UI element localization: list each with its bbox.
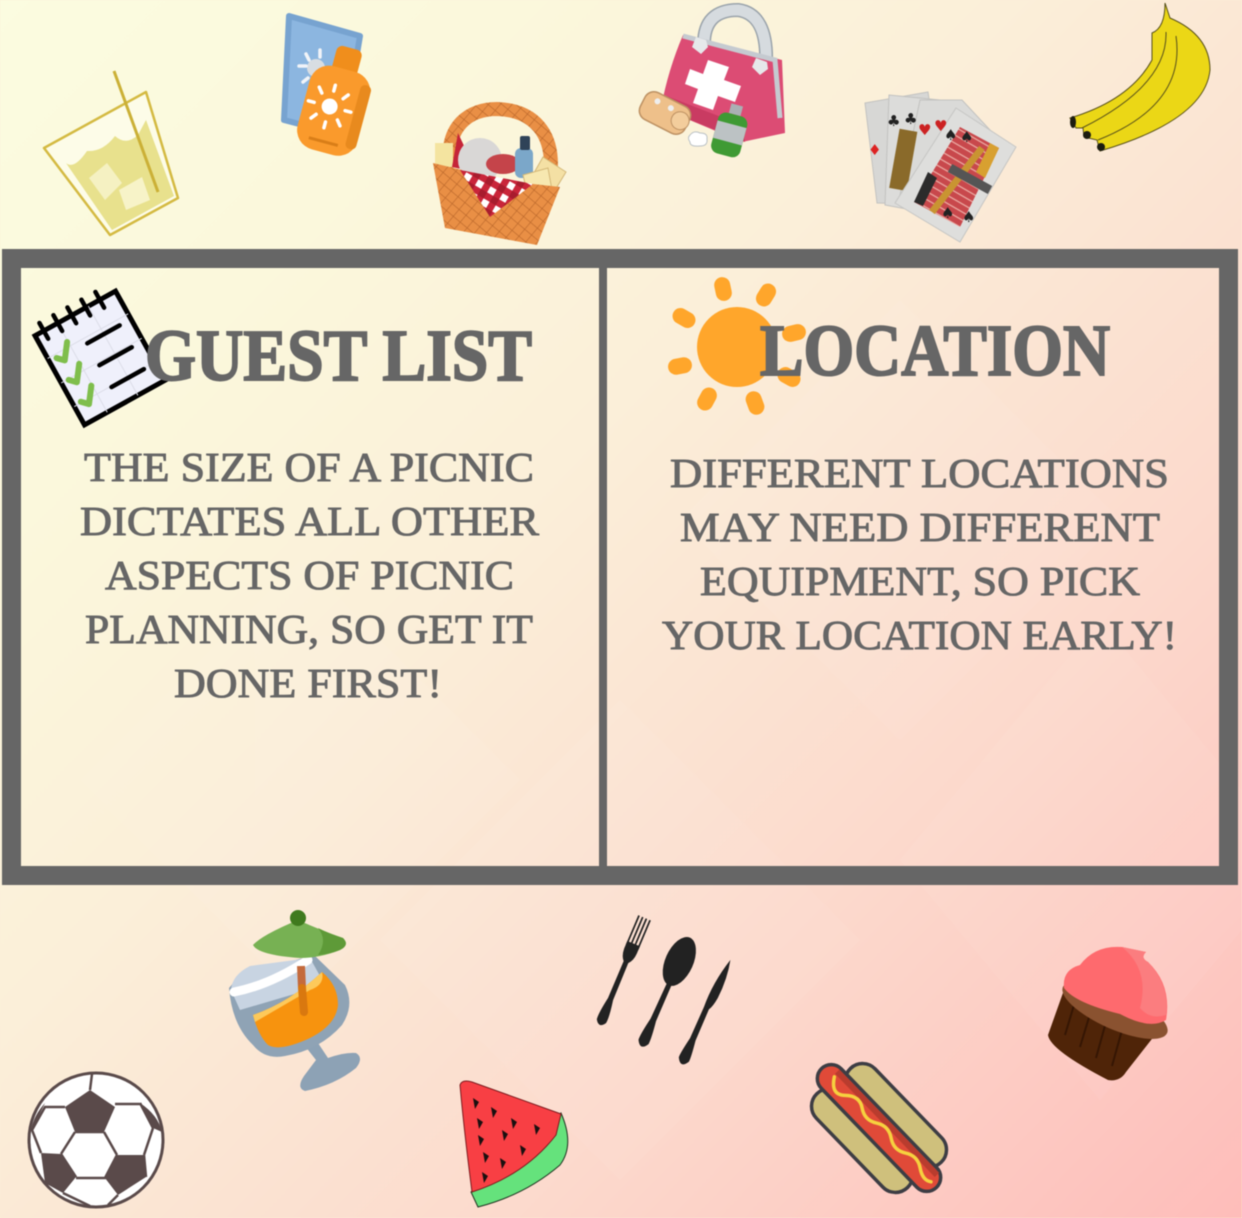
icon: sunscreen bbox=[284, 16, 380, 160]
text block: guest list body: PLANNING, SO GET IT bbox=[85, 606, 533, 652]
icon: cocktail with umbrella bbox=[229, 910, 360, 1091]
icon: lemonade glass bbox=[44, 71, 178, 235]
heading: location: LOCATION bbox=[760, 310, 1110, 391]
icon: playing cards: ♥ bbox=[934, 117, 947, 135]
icon: playing cards: ♥ bbox=[918, 121, 931, 139]
panel: location bbox=[662, 276, 1177, 658]
icon: fork, spoon and knife bbox=[593, 915, 734, 1067]
text block: guest list body: ASPECTS OF PICNIC bbox=[105, 552, 514, 598]
text block: guest list body: DONE FIRST! bbox=[174, 660, 442, 706]
text block: guest list body: DICTATES ALL OTHER bbox=[80, 498, 540, 544]
icon: cupcake bbox=[1048, 947, 1175, 1080]
icon: checklist notepad bbox=[31, 283, 165, 425]
icon: playing cards: ♠ bbox=[960, 128, 973, 146]
text block: location body: MAY NEED DIFFERENT bbox=[680, 504, 1160, 550]
frame: grey border and divider bbox=[2, 249, 1238, 885]
icon: playing cards: ♦ bbox=[868, 141, 881, 159]
icon: sun bbox=[667, 276, 807, 417]
icon: soccer ball bbox=[29, 1073, 163, 1207]
heading: guest list: GUEST LIST bbox=[145, 315, 532, 396]
icon: playing cards: ♣ bbox=[887, 112, 900, 130]
text block: location body: EQUIPMENT, SO PICK bbox=[700, 558, 1140, 604]
icon: playing cards bbox=[865, 92, 1016, 242]
icon: playing cards: ♠ bbox=[944, 126, 957, 144]
icon: hot dog bbox=[794, 1042, 964, 1214]
icon: playing cards: ♠ bbox=[941, 204, 954, 222]
icon: playing cards: ♣ bbox=[904, 110, 917, 128]
panel: guest list bbox=[31, 283, 540, 706]
text block: location body: YOUR LOCATION EARLY! bbox=[662, 612, 1177, 658]
icon: watermelon slice bbox=[460, 1081, 568, 1207]
text block: guest list body: THE SIZE OF A PICNIC bbox=[84, 444, 534, 490]
text block: location body: DIFFERENT LOCATIONS bbox=[670, 450, 1169, 496]
icon: playing cards: ♠ bbox=[962, 208, 975, 226]
icon: bananas bbox=[1070, 3, 1210, 151]
text block: guest list body bbox=[80, 444, 540, 706]
icon: picnic basket bbox=[433, 109, 566, 245]
icon: first aid bag bbox=[636, 10, 785, 159]
text block: location body bbox=[662, 450, 1177, 658]
